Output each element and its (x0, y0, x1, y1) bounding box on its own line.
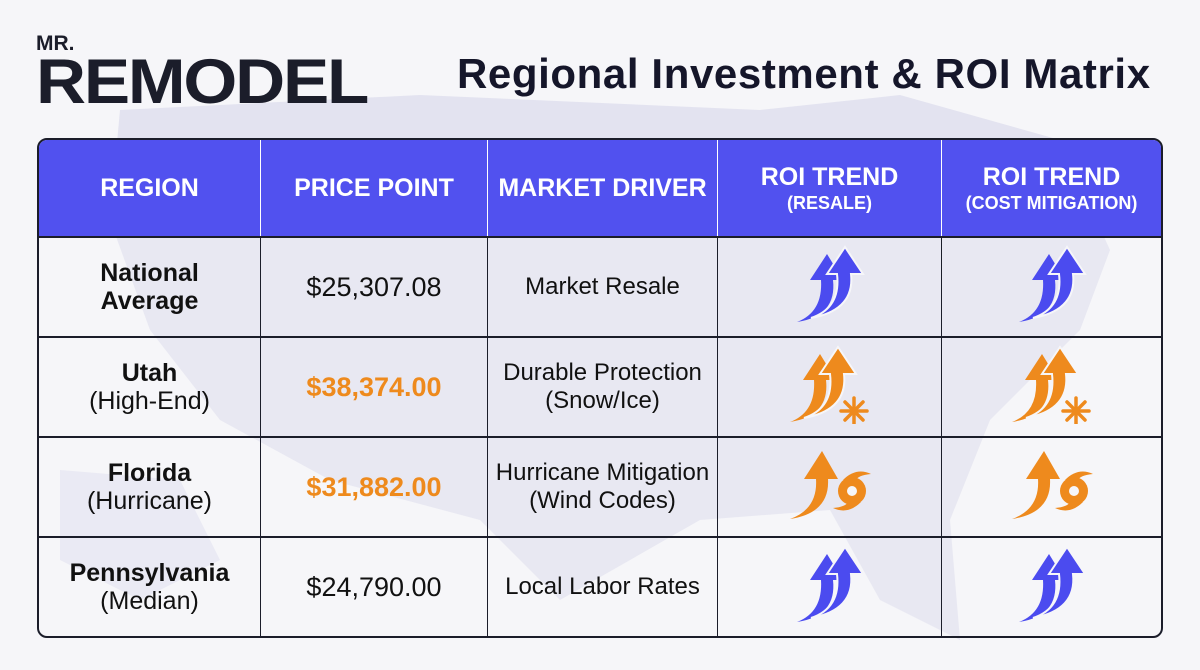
table: Durable Protection (503, 359, 702, 386)
table: Pennsylvania (70, 559, 229, 587)
table: Local Labor Rates (505, 573, 700, 600)
table: REGION (100, 174, 199, 202)
table: ROI TREND (761, 162, 898, 190)
table: Average (101, 287, 198, 315)
logo: MR. (36, 32, 74, 55)
table: (Wind Codes) (529, 487, 676, 514)
table: (Hurricane) (87, 487, 212, 515)
table: $38,374.00 (306, 372, 442, 402)
logo: REMODEL (36, 47, 367, 117)
table (37, 138, 1163, 638)
table: PRICE POINT (294, 174, 454, 202)
table: (Median) (100, 587, 199, 615)
table: (COST MITIGATION) (966, 192, 1137, 212)
table: National (100, 259, 199, 287)
table: Market Resale (525, 273, 680, 300)
table: Florida (108, 459, 191, 487)
table: $24,790.00 (306, 572, 442, 602)
table: Utah (122, 359, 177, 387)
table: (High-End) (89, 387, 210, 415)
table: (Snow/Ice) (545, 387, 660, 414)
table: Hurricane Mitigation (496, 459, 709, 486)
table: ROI TREND (983, 162, 1120, 190)
table: $31,882.00 (306, 472, 442, 502)
table: MARKET DRIVER (498, 174, 707, 202)
title: Regional Investment & ROI Matrix (457, 50, 1151, 97)
table: (RESALE) (787, 192, 872, 212)
table: $25,307.08 (306, 272, 442, 302)
